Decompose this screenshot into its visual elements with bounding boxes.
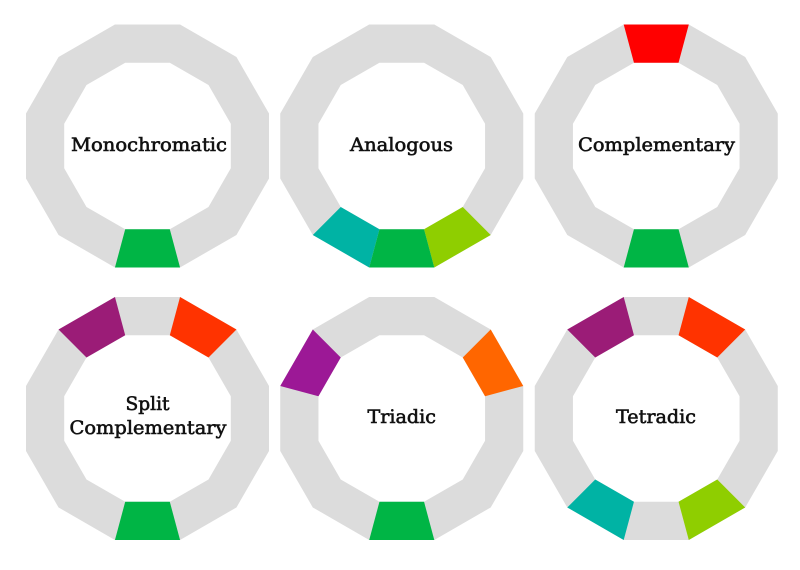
label: Split Complementary: Complementary: [70, 417, 227, 439]
panel: analogous wheel: [280, 24, 523, 268]
wheel ring: [280, 24, 523, 268]
red-orange segment: [679, 297, 745, 358]
label: Split Complementary: Split: [126, 393, 170, 415]
wheel ring: [535, 297, 778, 540]
violet segment: [280, 330, 341, 396]
label: Complementary: Complementary: [578, 134, 735, 156]
wheel ring: [26, 297, 269, 540]
label: Monochromatic: Monochromatic: [71, 134, 227, 156]
purple segment: [59, 297, 125, 358]
green segment: [369, 502, 434, 540]
label: Tetradic: Tetradic: [616, 406, 696, 428]
orange segment: [463, 330, 523, 396]
wheel ring: [26, 24, 269, 268]
green segment: [115, 229, 180, 268]
purple segment: [567, 297, 634, 358]
label: Analogous: Analogous: [349, 134, 453, 156]
red segment: [624, 24, 689, 63]
wheel ring: [280, 297, 523, 540]
lime segment: [424, 207, 491, 268]
teal segment: [313, 207, 379, 268]
teal segment: [567, 480, 634, 540]
wheel ring: [535, 24, 778, 268]
panel: complementary wheel: [535, 24, 778, 268]
panel: monochromatic wheel: [26, 24, 269, 268]
green segment: [624, 229, 689, 268]
panel: tetradic wheel: [535, 297, 778, 540]
label: Split Complementary: [70, 393, 227, 439]
green segment: [369, 229, 434, 268]
lime segment: [679, 480, 745, 540]
label: Triadic: Triadic: [368, 406, 436, 428]
panel: triadic wheel: [280, 297, 523, 540]
red-orange segment: [170, 297, 236, 358]
panel: split complementary wheel: [26, 297, 269, 540]
green segment: [115, 502, 180, 540]
